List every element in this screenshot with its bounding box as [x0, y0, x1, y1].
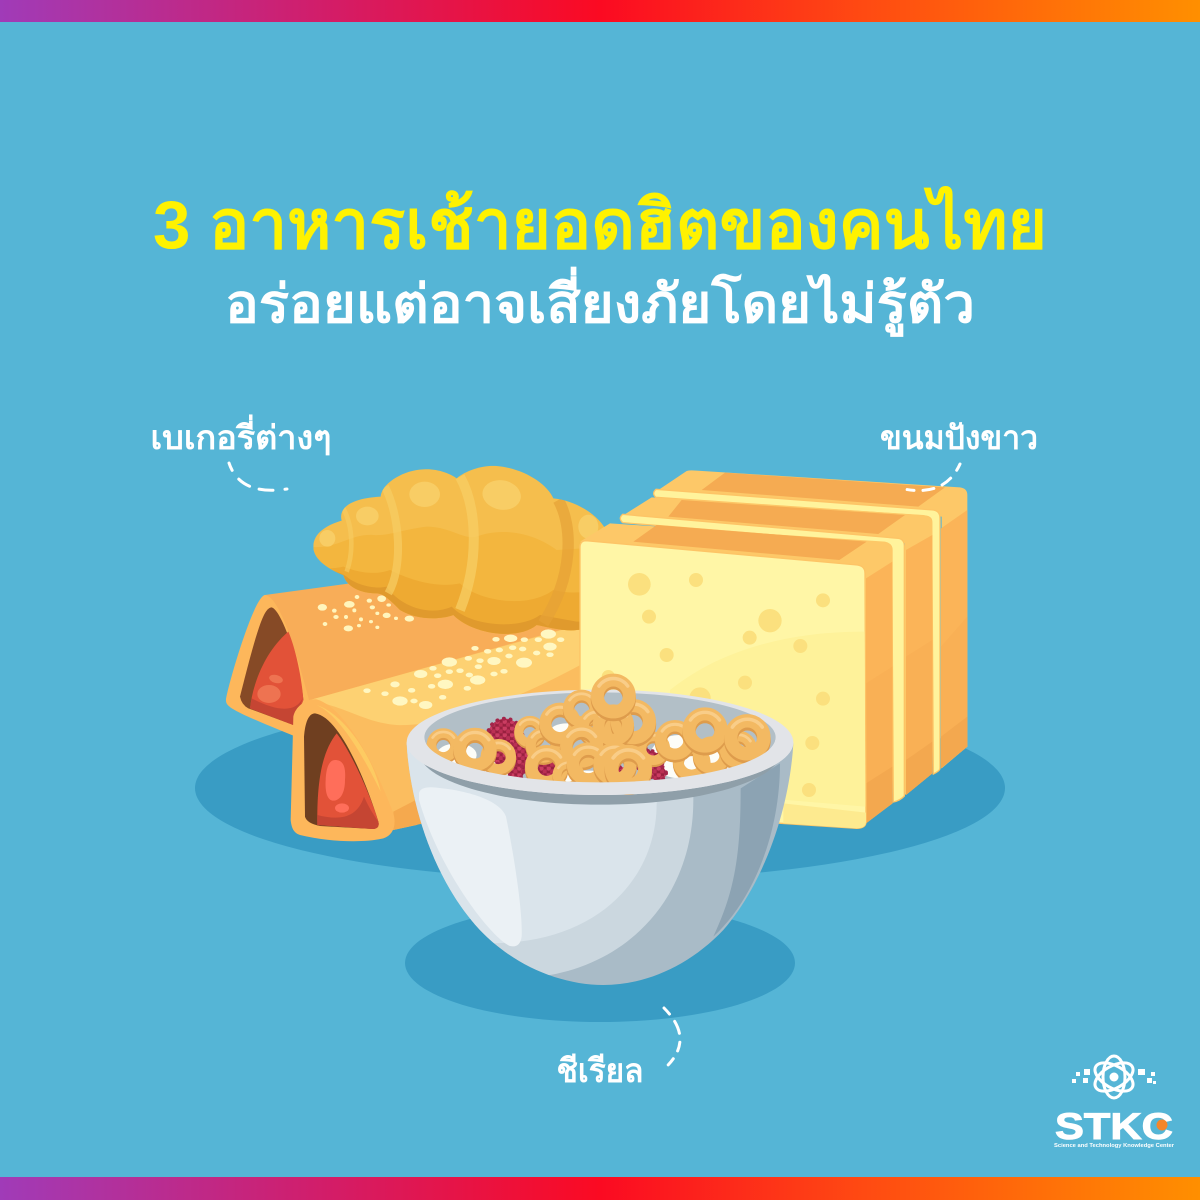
front pastry roll	[291, 623, 583, 841]
milk	[437, 723, 743, 783]
illustration: cereal bowl	[400, 660, 793, 985]
front slice	[580, 523, 893, 828]
illustration: bakery	[226, 463, 610, 841]
raspberries	[488, 719, 666, 781]
front rim	[407, 737, 793, 795]
dashed callout: bread	[904, 464, 960, 491]
bowl rim	[407, 690, 793, 795]
croissant	[313, 466, 604, 634]
back pastry roll	[226, 583, 593, 736]
small bowl shadow	[405, 904, 795, 1022]
label: white bread: ขนมปังขาว	[880, 419, 1038, 456]
logo tagline: Science and Technology Knowledge Center	[1054, 1143, 1175, 1149]
illustration: white bread slices	[580, 470, 967, 828]
logo orange dot	[1156, 1120, 1168, 1130]
dashed callout: cereal	[664, 1008, 680, 1069]
middle slice	[620, 497, 932, 802]
label: cereal: ชีเรียล	[556, 1052, 644, 1089]
label: bakery: เบเกอรี่ต่างๆ	[150, 414, 332, 456]
bowl interior	[424, 692, 776, 782]
logo wordmark: STKC	[1055, 1106, 1173, 1147]
subtitle: อร่อยแต่อาจเสี่ยงภัยโดยไม่รู้ตัว	[225, 266, 975, 337]
cereal rings	[431, 678, 764, 788]
large table shadow	[195, 696, 1005, 880]
logo atom icon	[1072, 1056, 1156, 1098]
bowl body	[406, 744, 794, 985]
back slice	[653, 470, 967, 774]
title: 3 อาหารเช้ายอดฮิตของคนไทย	[153, 185, 1047, 263]
bottom gradient bar	[0, 1177, 1200, 1200]
dashed callout: bakery	[229, 463, 287, 490]
top gradient bar	[0, 0, 1200, 22]
STKC logo	[1054, 1056, 1175, 1149]
